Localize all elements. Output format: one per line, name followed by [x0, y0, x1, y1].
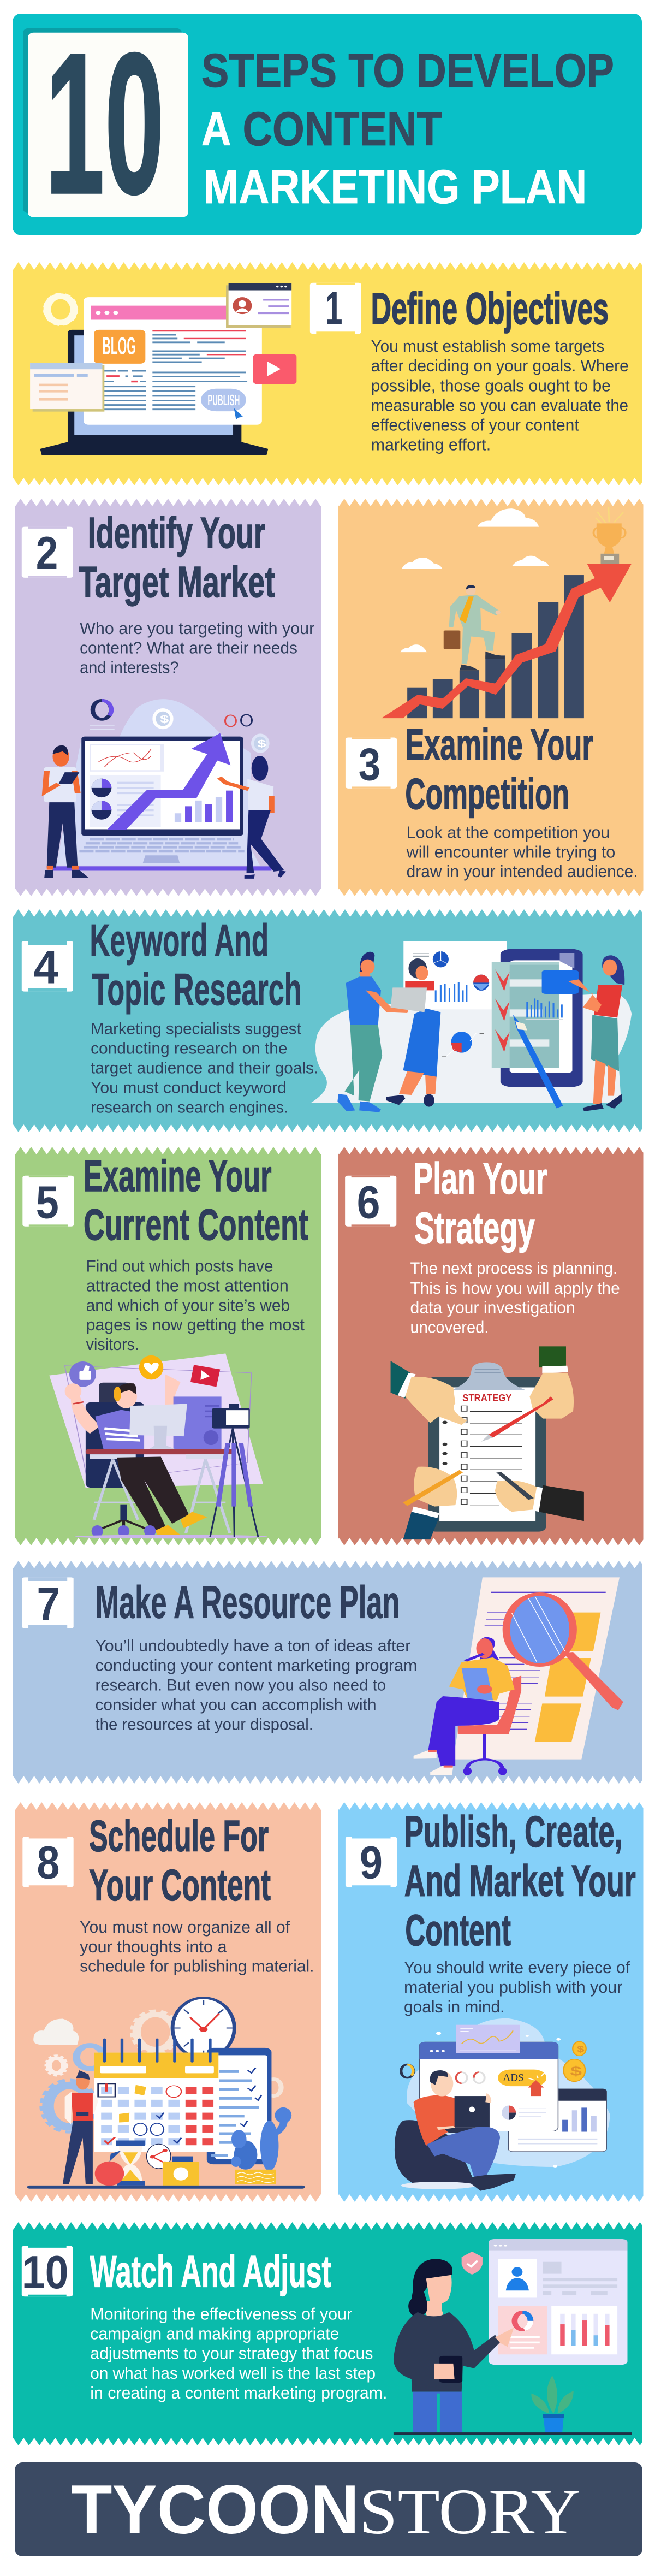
body text: goals in mind.: [404, 1997, 504, 2016]
illustration: man with laptop on bean bag and ad dashboard: ADS: [503, 2071, 524, 2083]
panel: step 4 keyword and topic research: [13, 909, 642, 1132]
illustration: laptop analytics with two people: $: [160, 714, 169, 725]
illustration: blog laptop: [30, 283, 296, 455]
body text: uncovered.: [410, 1318, 489, 1336]
illustration: man with laptop on bean bag and ad dashboard: $: [570, 2064, 582, 2078]
number badge 4: 4: [33, 941, 58, 993]
number badge 9: 9: [360, 1837, 383, 1888]
body text: effectiveness of your content: [371, 416, 579, 434]
illustration: man with laptop on bean bag and ad dashboard: $: [577, 2045, 585, 2054]
body text: attracted the most attention: [86, 1276, 289, 1295]
body text: [371, 337, 629, 454]
number badge 5: 5: [36, 1176, 59, 1228]
number badge 10: 10: [22, 2246, 69, 2298]
number badge 5: [22, 1176, 74, 1228]
body text: in creating a content marketing program.: [90, 2383, 387, 2402]
man: [337, 952, 408, 1112]
number badge 8: [22, 1837, 74, 1888]
number badge 10: [22, 2246, 73, 2298]
number badge 7: 7: [37, 1578, 60, 1630]
number badge 7: [22, 1577, 74, 1630]
woman right: [568, 955, 624, 1111]
body text: [410, 1259, 620, 1336]
number badge 1: 1: [325, 282, 343, 335]
panel: step 4 keyword and topic research: research on search engines.: [91, 1098, 288, 1116]
number badge 4: [22, 941, 73, 993]
body text: Monitoring the effectiveness of your: [90, 2305, 352, 2324]
body text: your thoughts into a: [80, 1937, 227, 1956]
body text: [404, 1958, 630, 2016]
body text: and interests?: [80, 658, 179, 677]
body text: conducting research on the: [91, 1039, 288, 1057]
illustration: woman presenting dashboard: [394, 2239, 632, 2435]
panel: step 8 schedule for your content: Schedule For: [89, 1811, 269, 1861]
body text: marketing effort.: [371, 435, 491, 454]
illustration: laptop analytics with two people: [44, 699, 286, 879]
panel: step 6 plan your strategy: [338, 1147, 643, 1545]
body text: [80, 1917, 314, 1976]
body text: and which of your site’s web: [86, 1295, 290, 1314]
woman centre: [386, 958, 440, 1107]
panel: step 9 publish, create, and market your content: [338, 1802, 643, 2202]
text: Current Content: [84, 1200, 308, 1249]
body text: adjustments to your strategy that focus: [90, 2344, 373, 2363]
panel: step 7 make a resource plan: [13, 1561, 642, 1784]
body text: the resources at your disposal.: [95, 1715, 313, 1733]
panel: step 2 identify your target market: [15, 499, 321, 896]
number badge 2: 2: [36, 527, 58, 578]
heading: [404, 1807, 636, 1955]
panel: step 1 define objectives: [13, 262, 642, 485]
panel: step 8 schedule for your content: [15, 1802, 321, 2202]
body text: pages is now getting the most: [86, 1315, 305, 1334]
body text: campaign and making appropriate: [90, 2324, 339, 2343]
heading: [89, 1811, 271, 1910]
title text: [201, 44, 614, 214]
illustration: blog laptop: PUBLISH: [207, 392, 240, 408]
body text: [80, 619, 314, 677]
illustration: woman with magnifier and document: [414, 1577, 623, 1775]
panel: step 5 examine your current content: [15, 1147, 321, 1545]
body text: Find out which posts have: [86, 1257, 273, 1275]
panel: step 2 identify your target market: Identify Your: [88, 508, 265, 557]
illustration: content creator at desk: [49, 1353, 267, 1538]
body text: on what has worked well is the last step: [90, 2364, 376, 2383]
number badge 8: 8: [37, 1837, 59, 1888]
body text: visitors.: [86, 1335, 139, 1354]
heading: [90, 915, 302, 1015]
body text: [95, 1637, 418, 1733]
illustration: man with laptop on bean bag and ad dashboard: [395, 2018, 610, 2191]
number badge 1: [310, 282, 361, 335]
panel: step 2 identify your target market: Target Market: [79, 558, 275, 606]
body text: schedule for publishing material.: [80, 1957, 314, 1976]
number badge 2: [22, 527, 73, 578]
number badge 3: 3: [359, 739, 380, 790]
body text: content? What are their needs: [80, 638, 297, 657]
logo wordmark: TYCOON: [71, 2471, 359, 2548]
title banner: 10: [45, 11, 164, 235]
illustration: climbing bar chart with trophy: [382, 507, 632, 718]
footer logo bar: [15, 2462, 642, 2556]
number badge 9: [346, 1837, 397, 1888]
title banner: [13, 11, 642, 235]
panel: step 4 keyword and topic research: Marketing specialists suggest: [91, 1020, 301, 1038]
illustration: strategy clipboard with hands: STRATEGY: [462, 1393, 511, 1404]
illustration: calendar, clock and planner: [27, 1998, 305, 2189]
illustration: laptop analytics with two people: $: [257, 738, 266, 749]
panel: step 8 schedule for your content: Your Content: [89, 1860, 271, 1910]
illustration: strategy clipboard with hands: [391, 1346, 584, 1539]
body text: You must conduct keyword: [91, 1079, 287, 1097]
panel: step 5 examine your current content: Examine Your: [84, 1151, 271, 1200]
title text: A CONTENT: [201, 102, 442, 155]
numeral box: 10: [23, 11, 188, 235]
illustration: blog laptop: BLOG: [102, 333, 136, 360]
body text: [86, 1257, 305, 1354]
heading: [84, 1151, 308, 1249]
heading: [414, 1153, 547, 1253]
illustration: research team with phone and charts: [311, 941, 632, 1112]
panel: step 4 keyword and topic research: target audience and their goals.: [91, 1059, 318, 1077]
body text: [406, 823, 638, 881]
heading: [405, 720, 593, 818]
panel: step 3 examine your competition: [338, 499, 643, 896]
panel: step 10 watch and adjust: [13, 2222, 642, 2445]
number badge 6: 6: [357, 1176, 380, 1228]
body text: [91, 1020, 318, 1116]
body text: Who are you targeting with your: [80, 619, 314, 638]
body text: [90, 2305, 387, 2402]
body text: You must now organize all of: [80, 1917, 290, 1937]
heading: [79, 508, 275, 606]
